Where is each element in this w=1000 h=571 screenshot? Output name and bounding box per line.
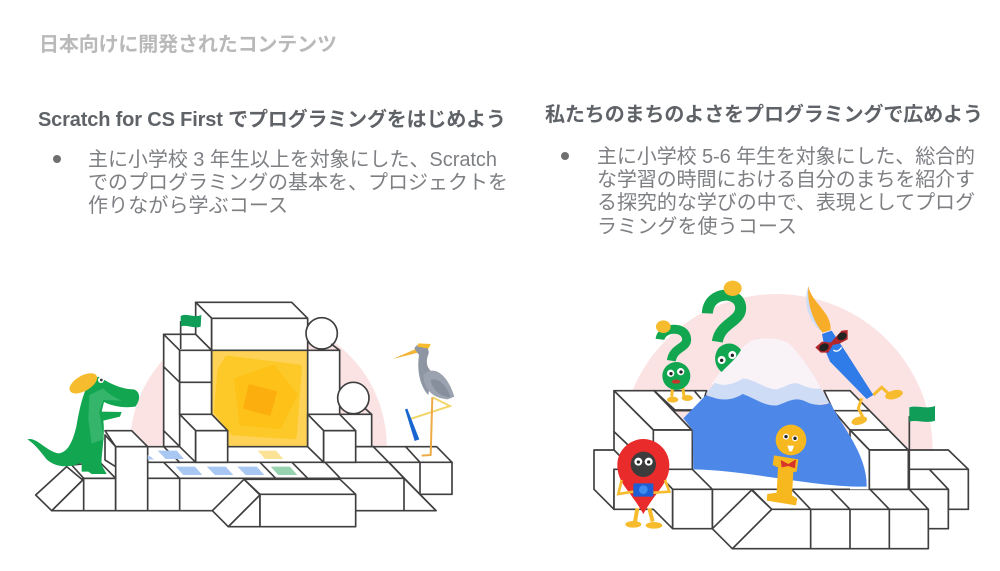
text block: Scratch course description: 作りながら学ぶコース <box>88 194 288 217</box>
text block: Scratch course description <box>88 148 508 217</box>
text block: town course description: 主に小学校 5-6 年生を対象にした、総合的 <box>597 145 975 168</box>
text block: Scratch course description: でのプログラミングの基本を、プロジェクトを <box>88 171 508 194</box>
white building blocks <box>36 302 452 527</box>
character: grey heron <box>393 343 454 456</box>
pink semicircle backdrop <box>621 294 933 450</box>
text block: town course description: る探究的な学びの中で、表現としてプログ <box>597 191 975 214</box>
mountain <box>683 338 867 487</box>
foreground blocks beside the screen <box>180 414 356 462</box>
title: 日本向けに開発されたコンテンツ <box>39 33 337 56</box>
bullet <box>561 152 569 160</box>
character: small question mark <box>656 320 693 403</box>
character: red map pin with camera <box>617 439 669 529</box>
panel: town course text <box>545 102 983 238</box>
coloured floor tiles <box>148 451 297 475</box>
character: large question mark <box>707 281 742 372</box>
icon: green flag <box>909 406 935 450</box>
text block: town course description <box>597 145 975 238</box>
character: green crocodile <box>27 369 139 474</box>
icon: green flag <box>181 315 201 348</box>
text block: town course description: ラミングを使うコース <box>597 215 797 238</box>
heading: Scratch for CS First: Scratch for CS First でプログラミングをはじめよう <box>38 107 506 131</box>
character: paintbrush with sunglasses <box>806 286 904 427</box>
yellow stage screen <box>212 350 308 447</box>
illustration: Scratch block stage <box>27 302 454 527</box>
text block: Scratch course description: 主に小学校 3 年生以上を対象にした、Scratch <box>88 148 497 171</box>
panel: Scratch course text <box>38 107 508 217</box>
heading: town programming: 私たちのまちのよさをプログラミングで広めよう <box>545 102 983 126</box>
bullet <box>53 155 61 163</box>
illustration: Mt. Fuji block scene <box>594 281 968 549</box>
pink semicircle backdrop <box>130 317 387 446</box>
character: number one <box>767 425 806 505</box>
text block: town course description: な学習の時間における自分のまちを紹介す <box>597 168 975 191</box>
white building blocks <box>594 391 968 549</box>
